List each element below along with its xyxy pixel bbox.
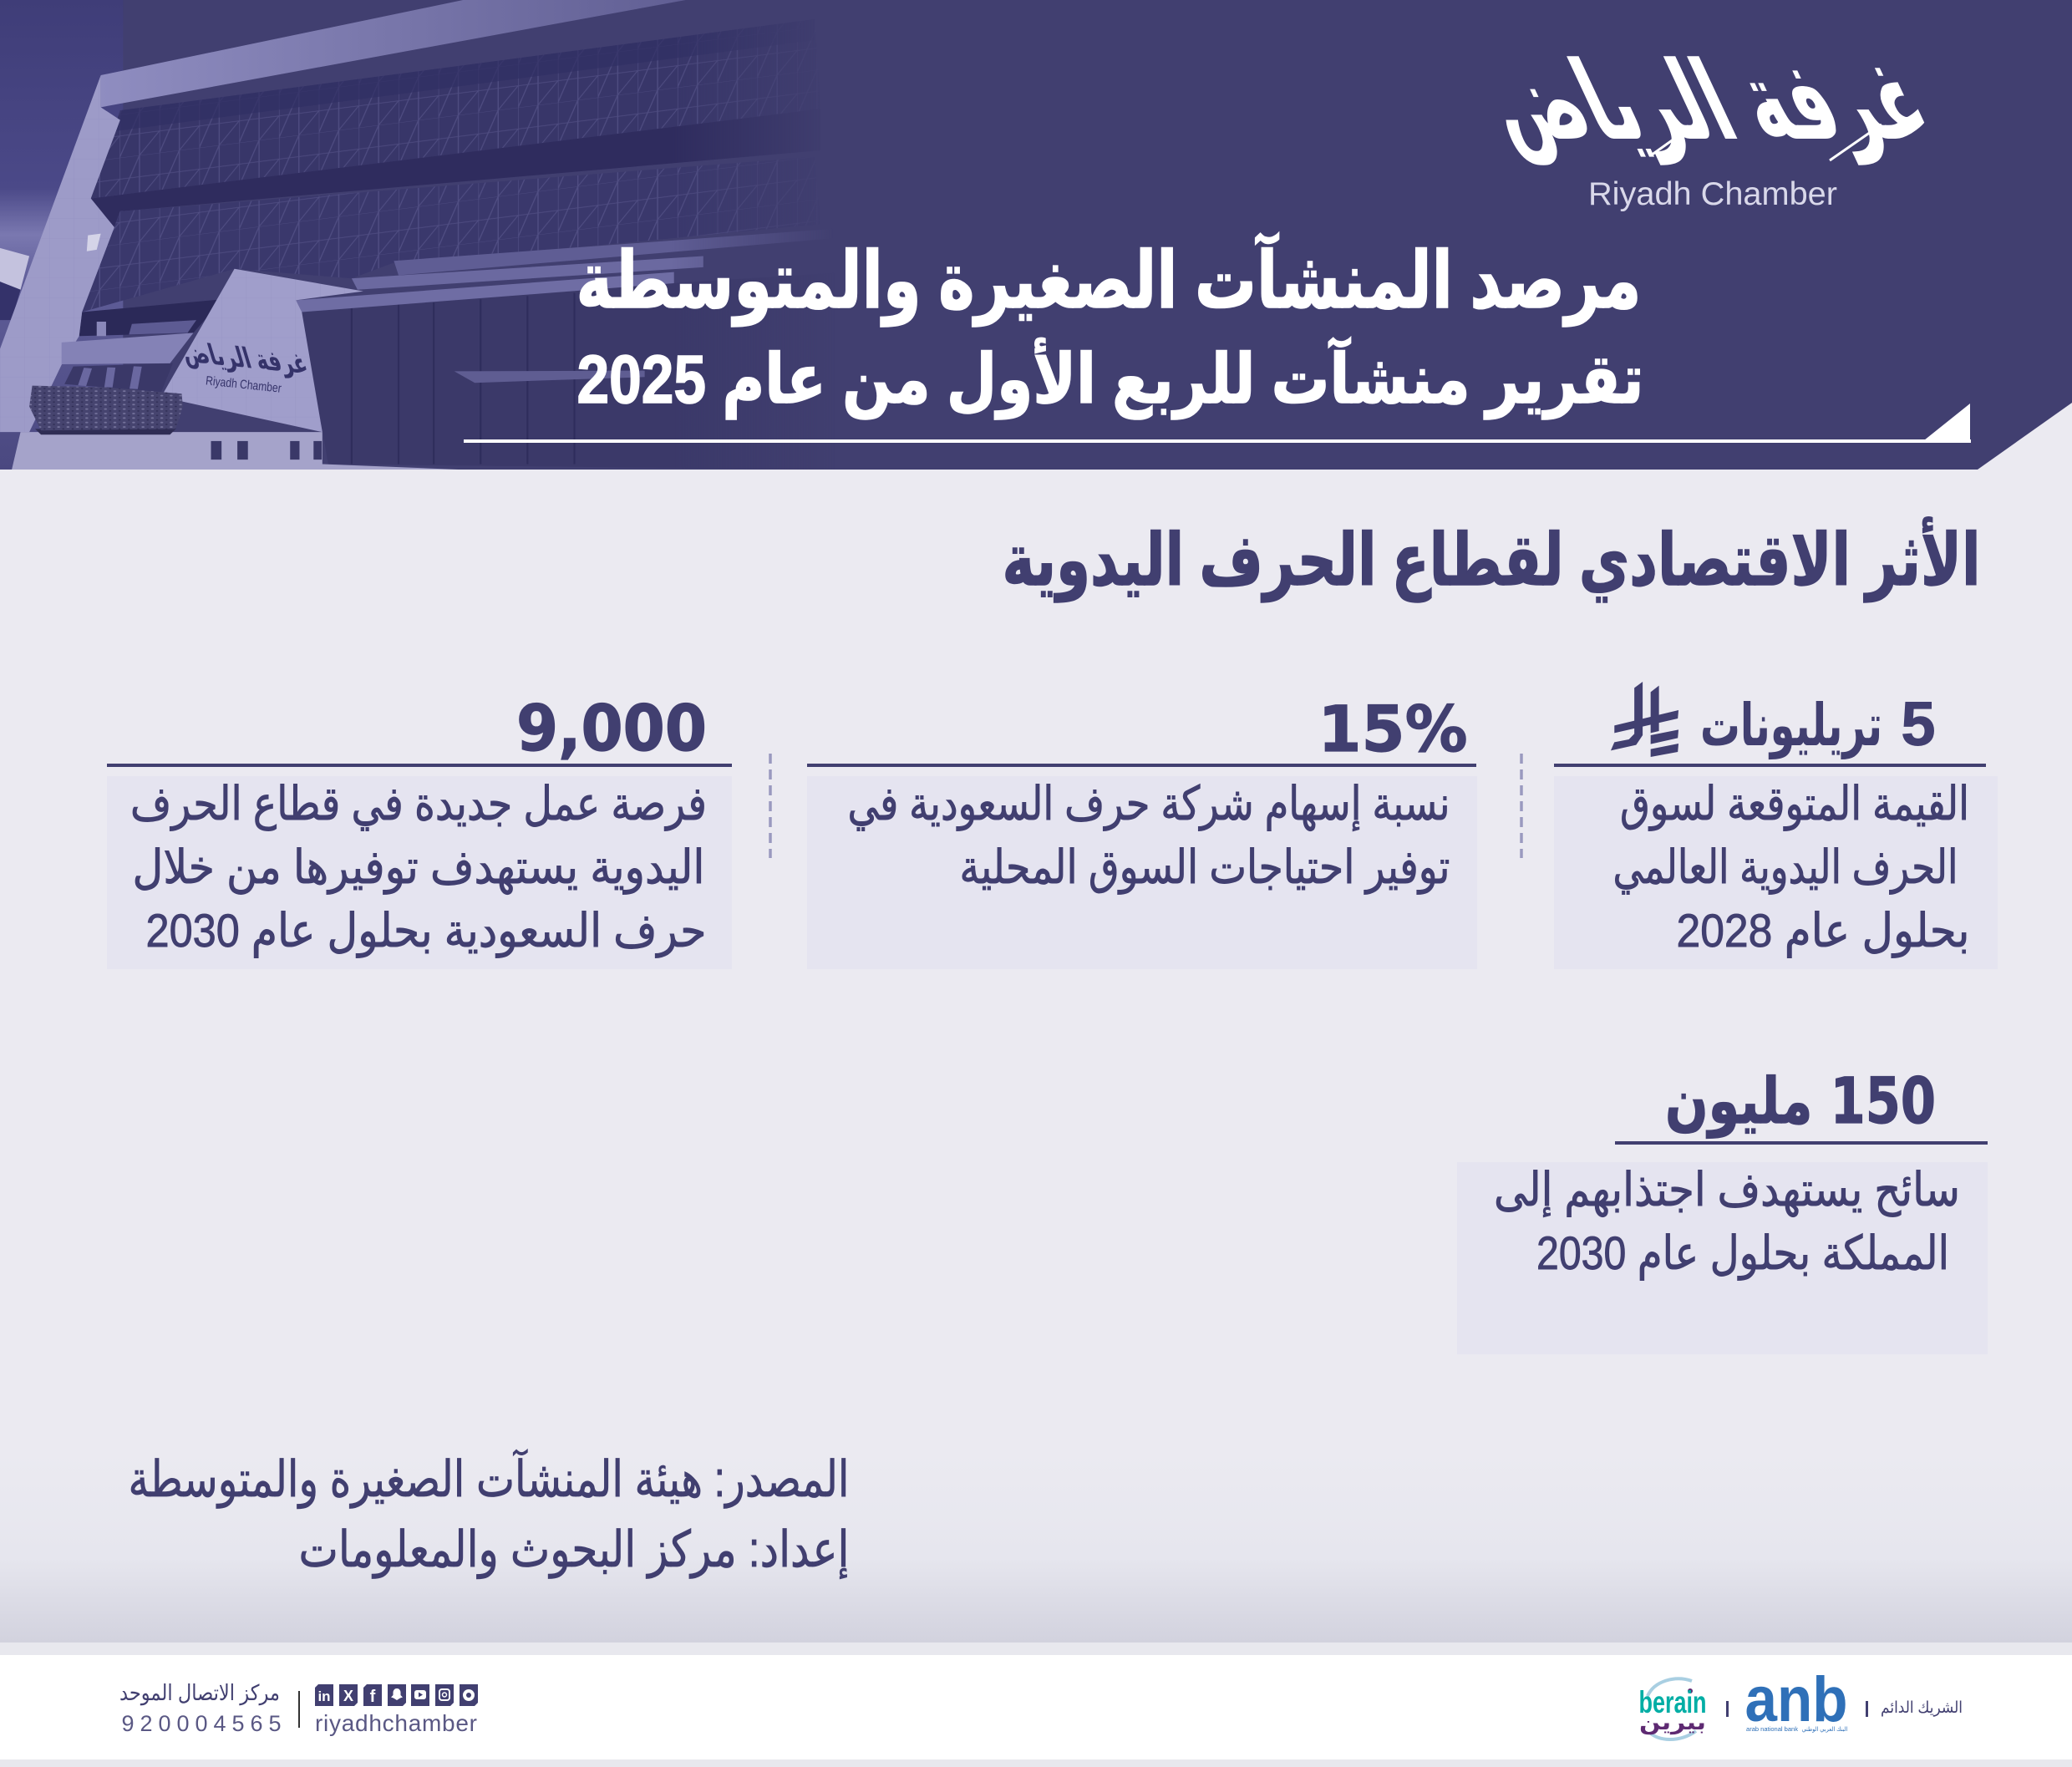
logo: Riyadh Chamber: غرفة الرياض xyxy=(1461,41,1952,166)
stat value: 15%: 15% xyxy=(1318,692,1467,766)
description xyxy=(1612,777,1970,958)
footer: unified contact centre: مركز الاتصال الموحد xyxy=(119,1680,280,1706)
footer band xyxy=(0,1643,2072,1767)
panel: 5 trillion riyals xyxy=(1554,682,1998,969)
building photo xyxy=(0,0,850,470)
logo: berain xyxy=(1639,1678,1706,1739)
logo: anb: arab national bank xyxy=(1746,1727,1799,1733)
description xyxy=(1494,1163,1960,1281)
building sign: غرفة الرياض xyxy=(177,337,312,381)
description: توفير احتياجات السوق المحلية xyxy=(959,840,1450,895)
title underline with triangle xyxy=(464,404,1971,443)
divider xyxy=(1520,754,1523,858)
logo: berain: berain xyxy=(1639,1685,1706,1719)
description: اليدوية يستهدف توفيرها من خلال xyxy=(132,840,705,895)
panel: 150 million xyxy=(1457,1064,1988,1354)
divider xyxy=(769,754,772,858)
description xyxy=(130,777,707,958)
subtitle: تقرير منشآت للربع الأول من عام 2025 xyxy=(576,337,1644,420)
header banner xyxy=(0,0,2072,470)
icon: riyal symbol xyxy=(1611,682,1678,757)
description: نسبة إسهام شركة حرف السعودية في xyxy=(847,777,1450,832)
logo: Riyadh Chamber xyxy=(1461,41,1952,212)
bottom background gradient xyxy=(0,1454,2072,1643)
description: سائح يستهدف اجتذابهم إلى xyxy=(1494,1163,1960,1218)
social icons: f xyxy=(370,1688,376,1706)
footer: permanent partner label: الشريك الدائم xyxy=(1881,1699,1963,1717)
logo: berain: بيرين xyxy=(1639,1709,1706,1735)
social icons xyxy=(315,1684,478,1706)
panel: 9,000 xyxy=(107,691,732,969)
separator xyxy=(1726,1701,1729,1717)
description: فرصة عمل جديدة في قطاع الحرف xyxy=(130,777,707,831)
footer: unified contact centre: 920004565 xyxy=(122,1711,281,1736)
building sign xyxy=(185,343,307,393)
stat value: 150 million: 150 مليون xyxy=(1665,1064,1936,1139)
description: الحرف اليدوية العالمي xyxy=(1612,840,1958,895)
logo: anb: anb xyxy=(1744,1664,1848,1735)
logo: Riyadh Chamber: Riyadh Chamber xyxy=(1588,176,1837,212)
handle: riyadhchamber xyxy=(315,1710,477,1736)
social icons: X xyxy=(343,1688,353,1704)
separator xyxy=(1866,1701,1868,1717)
source and preparation note: المصدر: هيئة المنشآت الصغيرة والمتوسطة xyxy=(129,1449,849,1509)
stat value: 9,000: 9,000 xyxy=(516,691,707,765)
panel: 15% xyxy=(807,692,1477,969)
footer: unified contact centre xyxy=(119,1680,281,1736)
footer divider xyxy=(298,1691,300,1728)
description: حرف السعودية بحلول عام 2030 xyxy=(145,904,707,958)
stat value: 5 trillion: تريليونات xyxy=(1700,693,1882,759)
description: القيمة المتوقعة لسوق xyxy=(1620,777,1969,831)
source and preparation note: إعداد: مركز البحوث والمعلومات xyxy=(299,1521,849,1579)
description: بحلول عام 2028 xyxy=(1676,904,1970,958)
title: مرصد المنشآت الصغيرة والمتوسطة xyxy=(576,231,1641,327)
description: المملكة بحلول عام 2030 xyxy=(1536,1226,1949,1281)
source and preparation note xyxy=(129,1449,849,1579)
logo: anb: البنك العربي الوطني xyxy=(1801,1727,1848,1733)
building sign: Riyadh Chamber xyxy=(205,373,282,396)
stat value: 5 trillion: 5 xyxy=(1901,689,1936,759)
social icons: in xyxy=(317,1688,331,1704)
description xyxy=(847,777,1450,895)
